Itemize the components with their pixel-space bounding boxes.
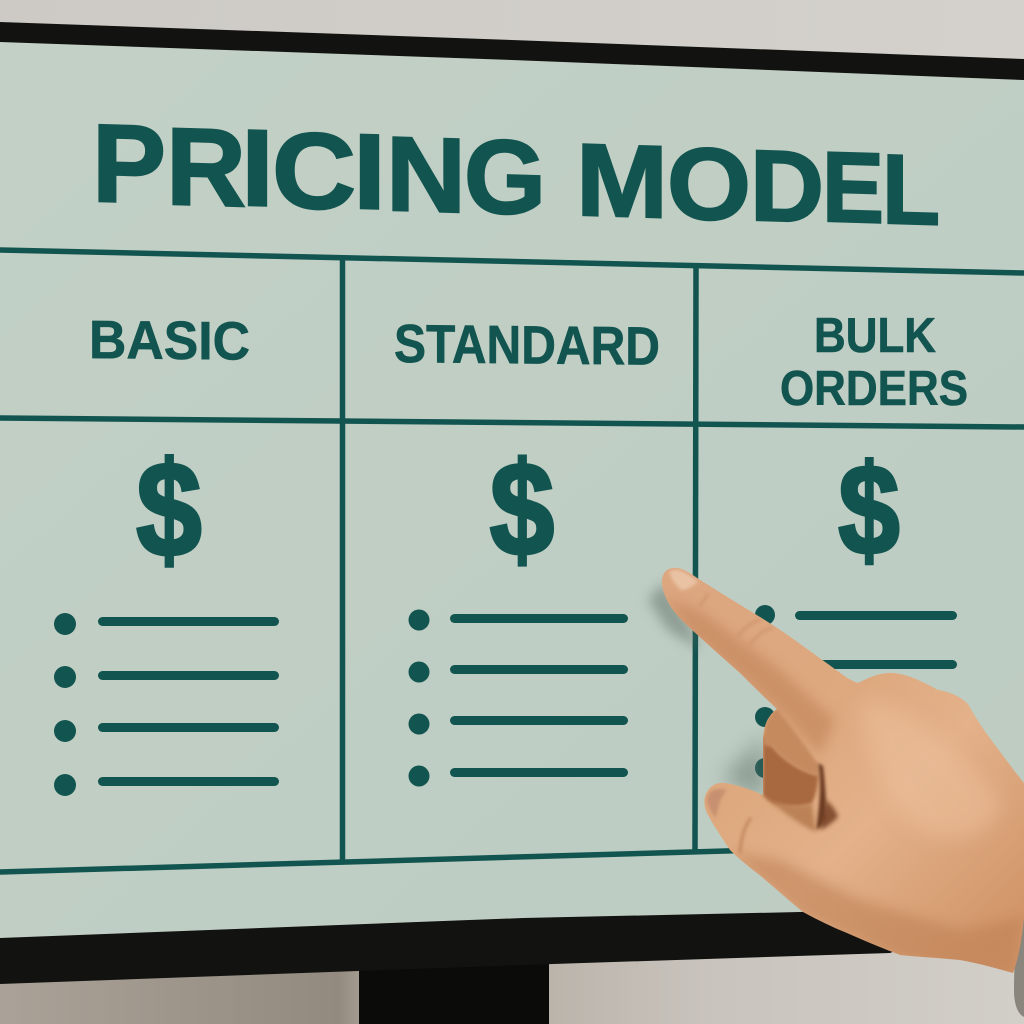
feature list: [755, 605, 957, 778]
thumbnail: [707, 789, 727, 818]
column: standard: [394, 314, 660, 786]
index knuckle wrinkles: [700, 594, 772, 645]
hand shading: [665, 594, 1024, 976]
heading: basic: BASIC: [89, 310, 250, 372]
middle finger knuckle: [763, 709, 818, 776]
title: G: [464, 118, 546, 237]
index fingernail: [669, 570, 698, 590]
heading: standard: STANDARD: [394, 314, 660, 377]
title: P: [92, 100, 166, 227]
column: basic: [54, 310, 279, 796]
title: D: [750, 130, 824, 244]
heading: bulk orders: ORDERS: [780, 362, 968, 416]
title: [92, 100, 940, 246]
title: C: [272, 109, 356, 232]
title: E: [822, 131, 884, 245]
sleeve cuff: [1014, 910, 1024, 1017]
column: bulk orders: [755, 309, 968, 778]
heading: bulk orders: [780, 309, 968, 416]
title: L: [882, 133, 940, 246]
curled middle finger: [763, 735, 818, 806]
title: I: [353, 111, 386, 232]
shade under middle finger: [772, 803, 817, 832]
table grid lines: [0, 250, 1024, 872]
lower edge shade: [730, 852, 1024, 976]
monitor stand: [359, 960, 549, 1024]
title: R: [166, 105, 246, 230]
title: N: [386, 115, 466, 235]
feature list: [408, 610, 628, 786]
index finger underside shade: [665, 598, 835, 755]
icon: dollar sign: $: [136, 433, 202, 585]
title: O: [667, 126, 751, 242]
feature list: [54, 613, 279, 796]
thumb crease: [740, 818, 751, 853]
icon: dollar sign: $: [838, 439, 900, 582]
hand silhouette: [662, 568, 1024, 973]
icon: dollar sign: $: [490, 436, 554, 584]
heading: bulk orders: BULK: [814, 309, 936, 363]
pointing hand: [662, 568, 1024, 976]
palm highlight: [860, 700, 1000, 838]
crease between fingers: [816, 763, 827, 830]
title: M: [576, 122, 668, 240]
hand shadow on screen: [648, 582, 765, 798]
title: I: [241, 107, 274, 230]
